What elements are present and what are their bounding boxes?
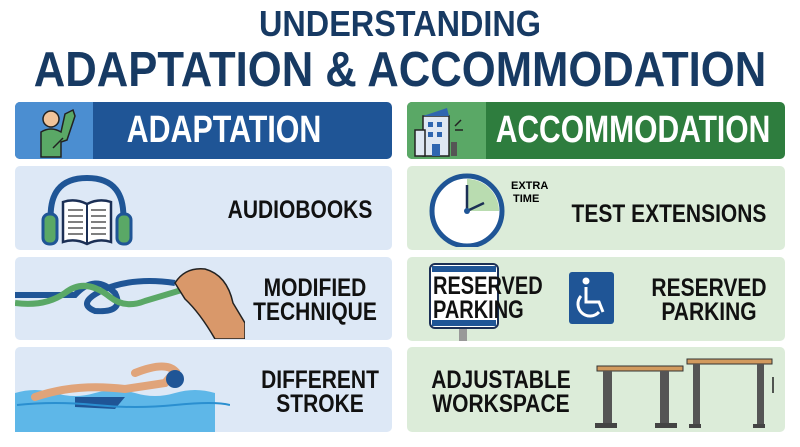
heading: ADAPTATION (127, 109, 321, 151)
panel: adaptation header (15, 102, 392, 159)
label (431, 366, 571, 418)
card: adjustable workspace (407, 347, 785, 432)
label: AUDIOBOOKS (228, 196, 372, 224)
icon: clock (430, 174, 548, 247)
label (651, 274, 767, 326)
label (253, 274, 377, 326)
icon: headphones book (42, 175, 132, 246)
icon: person (15, 102, 93, 159)
title: ADAPTATION & ACCOMMODATION (34, 43, 766, 97)
icon: swimmer (15, 362, 230, 432)
label: DIFFERENT (261, 366, 379, 394)
label: TECHNIQUE (253, 298, 377, 326)
label: STROKE (276, 390, 364, 418)
icon: desks (595, 358, 774, 428)
heading: ACCOMMODATION (496, 109, 770, 151)
icon: parking sign: RESERVED (433, 272, 543, 300)
icon: building (407, 102, 486, 159)
card: reserved parking (407, 257, 785, 341)
label (261, 366, 379, 418)
label: WORKSPACE (432, 390, 570, 418)
label: TEST EXTENSIONS (572, 200, 766, 228)
card: audiobooks (15, 166, 392, 250)
label: ADJUSTABLE (431, 366, 571, 394)
icon: clock: EXTRA (511, 180, 548, 192)
card: different stroke (15, 347, 392, 432)
icon: parking sign: PARKING (433, 296, 524, 324)
label: PARKING (661, 298, 757, 326)
card: modified technique (15, 257, 392, 340)
icon: clock: TIME (513, 193, 539, 205)
label: RESERVED (651, 274, 767, 302)
card: test extensions (407, 166, 785, 250)
label: MODIFIED (264, 274, 366, 302)
title (34, 3, 766, 97)
title: UNDERSTANDING (259, 3, 541, 44)
icon: parking sign (429, 263, 543, 341)
icon: knot and hand (15, 268, 245, 339)
panel: accommodation header (407, 102, 785, 159)
icon: wheelchair (569, 272, 614, 324)
